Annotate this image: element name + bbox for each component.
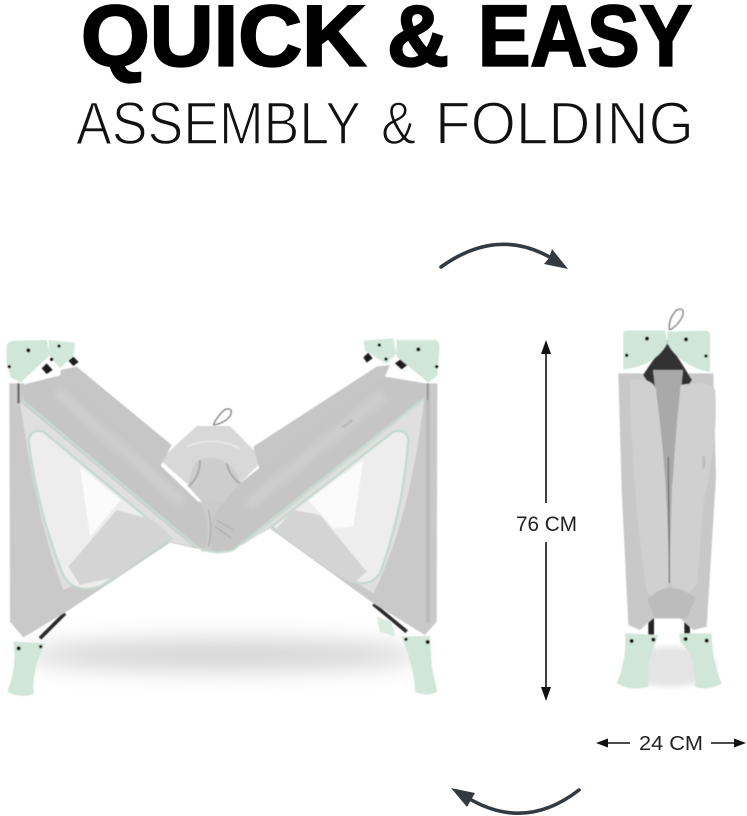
bottom right foot xyxy=(402,636,437,694)
centre cloth xyxy=(653,370,683,583)
bottom left foot xyxy=(7,642,45,696)
right fabric side panel xyxy=(230,383,437,635)
dimension: width 24 CM xyxy=(596,733,746,755)
carry loop xyxy=(669,309,683,330)
left pad xyxy=(630,380,669,598)
floor shadow xyxy=(23,639,423,671)
unfolded travel cot, half folded xyxy=(7,338,439,696)
dimension: height 76 CM: 76 CM xyxy=(516,513,577,536)
top corner caps (left) xyxy=(7,340,75,383)
right front tube xyxy=(210,377,425,553)
centre fold backing xyxy=(197,502,235,552)
top corner caps (right) xyxy=(363,338,439,383)
back fabric xyxy=(618,373,716,630)
title xyxy=(81,0,692,84)
right front tube: hauck xyxy=(341,417,355,429)
subtitle: ASSEMBLY xyxy=(76,90,361,157)
subtitle: & xyxy=(381,90,416,157)
left foot xyxy=(617,633,658,689)
folded centre creases xyxy=(208,510,233,547)
cot body xyxy=(617,309,722,689)
arrow: fold to unfold (bottom) xyxy=(451,788,579,813)
top right cap xyxy=(667,331,710,372)
right pad xyxy=(671,383,716,594)
back feet and legs xyxy=(40,604,407,638)
left front tube xyxy=(22,375,208,551)
bottom pouch xyxy=(647,588,696,618)
top left cap xyxy=(623,331,667,369)
arrow: unfold to fold (top) xyxy=(441,244,568,269)
right mesh panel xyxy=(240,400,424,593)
subtitle xyxy=(76,90,694,157)
centre bag with loop xyxy=(160,409,263,512)
left fabric side panel xyxy=(9,383,203,637)
right foot xyxy=(679,633,722,689)
floor shadow xyxy=(623,647,717,687)
mint piping xyxy=(22,398,424,552)
steel legs xyxy=(648,615,690,635)
wedge between caps xyxy=(643,340,692,390)
cot body: hauck xyxy=(701,455,706,468)
dimension: width 24 CM: 24 CM xyxy=(639,733,703,755)
black hinges xyxy=(17,353,429,403)
left back tube xyxy=(60,367,172,470)
fully folded travel cot xyxy=(617,309,722,689)
cot body xyxy=(7,338,439,696)
left mesh panel xyxy=(20,402,193,590)
dimension: height 76 CM xyxy=(516,340,577,701)
subtitle: FOLDING xyxy=(435,90,694,157)
right back tube xyxy=(253,365,390,483)
